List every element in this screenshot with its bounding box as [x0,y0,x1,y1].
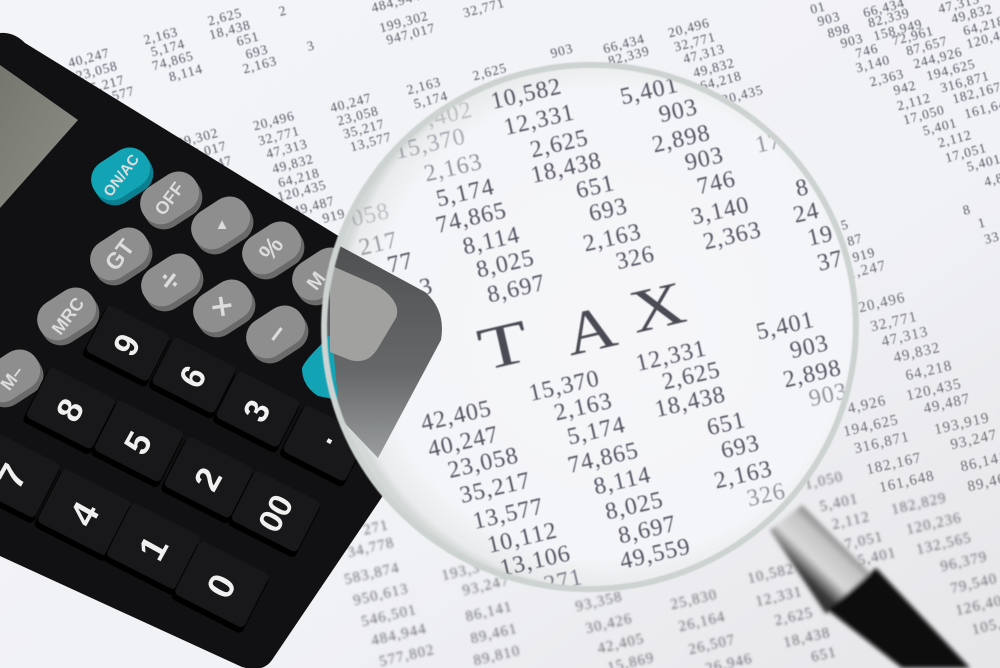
printed number table on paper, top: 158,949 [872,16,924,43]
grey key through glass [330,265,397,361]
magnified numbers: 903 [807,378,850,412]
calculator [0,33,400,668]
magnified numbers: 15,370 [392,123,468,165]
magnified numbers: 7,402 [412,97,475,135]
printed number table on paper, bottom: 193,3 [440,560,482,584]
printed number table on paper, top: 87 [845,230,864,249]
printed number table on paper, bottom: 26,507 [687,632,737,658]
magnified numbers: 18,438 [652,381,728,423]
key 0 [170,539,271,634]
printed number table on paper, bottom: 42,405 [596,631,646,657]
printed number table on paper, top: 2,163 [405,74,443,97]
printed number table on paper, bottom [343,517,838,668]
magnified numbers: 903 [683,142,726,176]
key point: . [307,426,339,449]
key 00: 00 [250,488,301,538]
function keys [0,140,362,415]
printed number table on paper, bottom: 271 [362,517,390,539]
printed number table on paper, top: 903 [816,8,842,29]
heading: TAX: A [559,293,623,369]
magnified numbers: 74,865 [565,437,641,479]
magnified numbers: 24 [791,198,822,229]
printed number table on paper, top: 2,625 [471,60,509,83]
blurred number table, lower right: 2,112 [830,509,872,533]
printed number table on paper, right: 32,771 [869,309,919,335]
printed number table on paper, top: 316,871 [939,68,991,95]
printed number table on paper, bottom: 93,358 [574,589,624,615]
printed number table on paper, top: 2,163 [142,24,180,47]
printed number table on paper, right [842,258,1000,496]
metal ferrule [770,505,870,614]
printed number table on paper, top: 2,625 [206,5,244,28]
heading: TAX: T [472,307,535,384]
key 1 [102,501,203,596]
key 1: 1 [131,529,176,567]
magnified numbers: 10,112 [485,518,560,559]
magnified numbers: 693 [719,430,762,464]
key: GT [82,220,160,293]
key: OFF [132,164,210,237]
printed number table on paper, top: 3,140 [854,52,892,75]
magnified numbers: 651 [574,170,617,204]
key 6: 6 [172,360,215,395]
printed number table on paper, top: 847 [208,152,234,173]
printed number table on paper, bottom: 18,438 [782,625,832,651]
printed number table on paper, top: 919 [851,244,877,265]
printed number table on paper, bottom: 93,247 [461,573,511,599]
printed number table on paper, top: 23,058 [335,103,380,128]
key 3 [211,370,302,454]
magnified numbers: 37 [815,246,846,277]
magnified numbers: 17 [753,128,784,159]
printed number table on paper, right: 49,487 [922,391,972,417]
magnified numbers: 13,577 [470,493,546,535]
key: multiply: × [202,288,242,324]
key: ON/AC [83,140,161,213]
printed number table on paper, bottom: 26,164 [677,609,727,635]
printed number table on paper, top: 35,217 [81,72,126,97]
printed number table on paper, top: 942 [892,77,918,98]
printed number table on paper, top: 72,961 [890,23,935,48]
teal key through glass [326,336,338,400]
printed number table on paper, bottom: 34,778 [346,535,396,561]
magnified numbers: 23,058 [445,442,521,484]
printed number table on paper, top: 5,174 [412,88,450,111]
printed number table on paper, top: 49,832 [949,1,994,26]
printed number table on paper, top: 66,434 [601,31,646,56]
blurred number table, lower right: 120,236 [905,510,963,538]
calculator seen through glass [318,245,442,458]
key: M+ [284,240,362,313]
printed number table on paper, top: 82,339 [866,5,911,30]
lens glass [283,23,897,631]
magnified numbers: 8,025 [603,487,666,525]
printed number table on paper, top: 746 [854,40,880,61]
magnified numbers: 746 [695,166,738,200]
printed number table on paper, top: 35,217 [341,116,386,141]
printed number table on paper, top: 5 [839,216,850,233]
magnified numbers: 2,625 [660,357,723,395]
printed number table on paper, right: 47,313 [880,324,930,350]
magnified numbers: 12,331 [501,99,577,141]
blurred number table, lower right: 79,540 [949,571,999,597]
printed number table on paper, top: 5,174 [149,36,187,59]
magnified numbers: 74,865 [433,197,509,239]
key 8: 8 [49,392,92,428]
key 8 [22,366,117,456]
printed number table on paper, top: 32,771 [672,29,717,54]
key: ON/AC: ON/AC [100,151,143,200]
calculator display [0,65,78,208]
magnified numbers: 217 [357,227,400,261]
key: divide [133,246,211,319]
magnified numbers: 326 [745,478,788,512]
key: play: ▲ [215,216,229,233]
printed number table on paper, bottom: 25,830 [669,587,719,613]
printed number table on paper, top: 5,401 [921,115,959,138]
printed number table on paper, top: 18,438 [207,17,252,42]
blurred number table, lower right [803,469,1000,638]
printed number table on paper, top: 898 [826,20,852,41]
printed number table on paper, top: 8 [961,201,972,218]
magnified numbers [349,72,850,598]
printed number table on paper, top: 64,218 [698,68,743,93]
printed number table on paper, right: 49,832 [892,340,942,366]
key: OFF: OFF [151,178,188,219]
printed number table on paper, top: 2 [277,2,288,19]
printed number table on paper, bottom: 651 [810,644,838,666]
magnified numbers: 693 [587,193,630,227]
magnified numbers: 651 [705,407,748,441]
magnified numbers: 2,163 [552,388,615,426]
printed number table on paper, right: 182,167 [865,450,923,478]
printed number table on paper, top: 82,339 [606,43,651,68]
printed number table on paper, top: 17,050 [901,102,946,127]
printed number table on paper, top: 64,218 [276,165,321,190]
key 7 [0,429,62,524]
printed number table on paper, bottom: 583,874 [343,560,401,588]
printed number table on paper, top [66,0,1000,265]
printed number table on paper, right: 161,648 [878,468,936,496]
printed number table on paper, right: 20,496 [857,290,907,316]
magnified numbers: 8 [793,174,812,202]
blurred number table, lower right: 5,401 [818,491,860,515]
magnified numbers: 5,174 [434,174,497,212]
magnified numbers: 2,163 [581,219,644,257]
printed number table on paper, top: 40,247 [328,90,373,115]
magnified numbers: 903 [788,330,831,364]
magnifier handle [770,505,970,668]
magnified numbers: 2,898 [781,355,844,393]
magnified numbers: 2,163 [422,149,485,187]
key: multiply [185,272,263,345]
printed number table on paper, right: 64,218 [904,358,954,384]
printed number table on paper, top: 903 [839,30,865,51]
magnified numbers: 15,370 [526,365,602,407]
magnified numbers: 2,898 [650,120,713,158]
blurred number table, lower right: 132,565 [915,530,973,558]
key: divide: ÷ [150,262,189,298]
printed number table on paper, top: 87,657 [904,33,949,58]
printed number table on paper, right: 1,247 [846,258,888,282]
magnifying glass lens [320,62,860,592]
printed number table on paper, bottom: 546,501 [360,602,418,630]
printed number table on paper, top: 199,302 [378,8,430,35]
printed number table on paper, top: 3 [305,37,316,54]
key: M minus [0,342,51,415]
printed number table on paper, right: 4,926 [846,393,888,417]
key 4 [33,467,134,562]
magnified numbers: 8,114 [591,462,654,500]
printed number table on paper, top: 20,496 [251,108,296,133]
printed number table on paper, top: 1 [976,214,987,231]
key 9: 9 [106,328,149,363]
magnified numbers: 19 [805,221,836,252]
calculator body [0,33,400,668]
magnified numbers: 326 [614,241,657,275]
key 5: 5 [117,425,160,461]
key 9 [81,304,172,388]
key: percent [234,214,312,287]
key 2: 2 [187,461,230,497]
blurred number table, lower right: 182,829 [890,490,948,518]
key: MRC: MRC [48,294,88,338]
printed number table on paper, top: 919 [321,205,347,226]
key 00 [227,469,322,559]
lens rim [283,23,897,631]
magnified numbers: 49,559 [617,533,693,575]
printed number table on paper, top: 8,114 [167,61,204,84]
blurred number table, lower right: 96,379 [939,549,989,575]
black grip [828,568,970,668]
printed number table on paper, top: 194,625 [925,56,977,83]
printed number table on paper, right: 316,871 [853,429,911,457]
printed number table on paper, top: 244,926 [912,44,964,71]
blurred number table, lower right: 7,051 [843,529,885,553]
key: M+: M [303,268,330,294]
printed number table on paper, top: 49,487 [291,193,336,218]
printed number table on paper, bottom: 950,613 [352,581,410,609]
heading: TAX [476,282,688,368]
printed number table on paper, bottom: 86,141 [464,599,514,625]
magnified numbers: 40,247 [425,421,501,463]
magnified numbers: 5,401 [618,72,681,110]
printed number table on paper, right: 194,625 [842,412,900,440]
magnified numbers: 13,106 [497,540,573,582]
magnified numbers: 2,363 [701,217,764,255]
printed number table on paper, right: 120,435 [905,376,963,404]
magnified numbers: 2,163 [712,456,775,494]
magnified numbers: 12,331 [633,335,709,377]
magnified numbers: 3 [417,273,436,301]
magnified numbers: 8,114 [460,222,523,260]
key 3: 3 [236,394,279,429]
printed number table on paper, right: 93,247 [949,427,999,453]
digit keys [0,304,369,634]
printed number table on paper, top: 23,058 [74,58,119,83]
printed number table on paper, top: 13,577 [91,83,136,108]
magnified numbers: 8,697 [485,270,548,308]
printed number table on paper, bottom: 12,331 [754,584,804,610]
printed number table on paper, top: 2,163 [241,53,279,76]
magnified numbers: 42,405 [418,395,494,437]
printed number table on paper, top: 13,577 [348,129,393,154]
printed number table on paper, top: 32,771 [256,123,301,148]
printed number table on paper, bottom: 484,944 [370,621,428,649]
magnified numbers: 058 [349,198,392,232]
printed number table on paper, top: 199,302 [168,125,220,152]
magnified numbers: 8,697 [616,511,679,549]
printed number table on paper, top: 947,017 [385,20,437,47]
key: minus: – [258,317,294,350]
printed number table on paper, bottom: 10,582 [746,561,796,587]
teal key behind lens edge [302,336,338,400]
printed number table on paper, top: 47,017 [183,138,228,163]
printed number table on paper, top: 651 [235,28,261,49]
magnified numbers: 3,140 [689,192,752,230]
printed number table on paper, top: 17,051 [943,140,988,165]
key: minus [238,298,316,371]
magnified numbers: 8,025 [474,245,537,283]
heading: TAX: X [623,268,692,346]
key: percent: % [254,231,289,266]
printed number table on paper, bottom: 2,625 [773,605,815,629]
printed number table on paper, top: 49,832 [691,55,736,80]
printed number table on paper, top: 40,247 [66,45,111,70]
key 2 [160,435,255,525]
key 5 [90,399,185,489]
key 0: 0 [199,567,244,605]
printed number table on paper, bottom: 89,461 [469,621,519,647]
printed number table on paper, top: 49,832 [270,151,315,176]
magnified numbers: 10,582 [488,73,564,115]
key 6 [147,336,238,420]
magnified numbers: 35,217 [457,467,533,509]
printed number table on paper, top: 120,435 [276,177,328,204]
key point [278,404,369,488]
printed number table on paper, top: 20,496 [666,15,711,40]
key: play [183,189,261,262]
magnified numbers: 5,174 [565,412,628,450]
magnified numbers: 5,401 [754,307,817,345]
blurred number table, lower right: 1,050 [803,469,845,493]
magnified numbers: 18,438 [528,147,604,189]
printed number table on paper, top: 2,363 [868,66,906,89]
printed number table on paper, top: 47,313 [264,136,309,161]
printed number table on paper, top: 2,112 [895,90,932,113]
magnified numbers: 2,625 [528,125,591,163]
key: MRC [29,280,107,353]
printed number table on paper, top: 74,865 [150,48,195,73]
blurred number table, lower right: 5,401 [856,545,898,569]
printed number table on paper, bottom: 30,426 [584,611,634,637]
magnified numbers: 271 [542,564,585,598]
printed number table on paper, right: 193,919 [933,410,991,438]
printed number table on paper, top: 903 [549,40,575,61]
printed number table on paper, top: 120,435 [713,82,765,109]
magnified numbers: 77 [385,248,416,279]
key: GT: GT [99,234,139,275]
printed number table on paper, top: 693 [244,41,270,62]
printed number table on paper, top: 47,313 [681,41,726,66]
printed number table on paper, top: 2,112 [936,127,973,150]
magnified numbers: 903 [657,94,700,128]
key 4: 4 [62,495,108,533]
